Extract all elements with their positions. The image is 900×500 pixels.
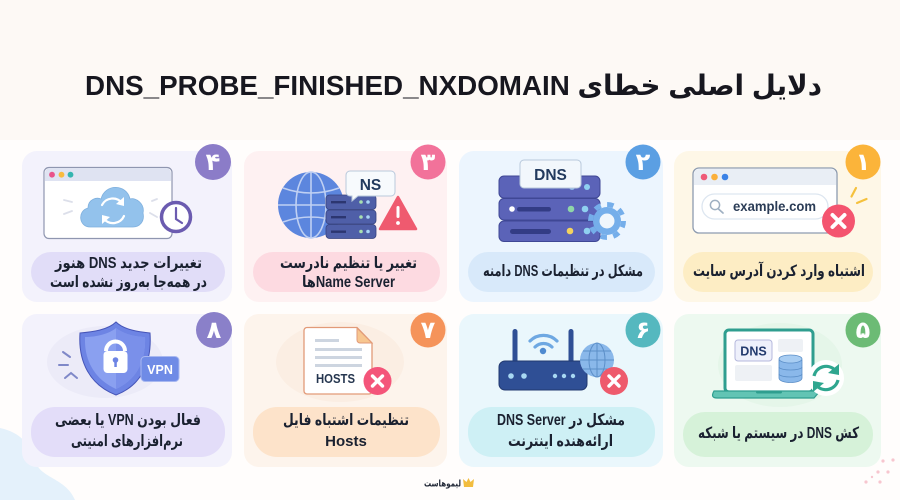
label: 5	[683, 412, 873, 457]
badge: 8	[196, 312, 232, 348]
label: 8: فعال بودن VPN یا بعضی	[55, 412, 201, 429]
label: 8: نرم‌افزارهای امنیتی	[71, 433, 183, 450]
label: 8	[31, 407, 225, 457]
label: 5: کش DNS در سیستم یا شبکه	[698, 425, 860, 442]
label: 4: در همه‌جا به‌روز نشده است	[50, 274, 207, 291]
badge: 6: ۶	[636, 317, 650, 344]
panel: 8 VPN and security software	[22, 312, 232, 467]
label: 2: مشکل در تنظیمات DNS دامنه	[483, 263, 643, 280]
label: 7: Hosts	[325, 433, 367, 450]
icon: hosts file with error	[304, 328, 392, 395]
icon: router, globe and error	[499, 329, 628, 395]
panel: 7 hosts file	[244, 312, 447, 467]
badge: 4: ۴	[206, 149, 220, 176]
badge: 3	[410, 144, 446, 180]
badge: 7	[410, 312, 446, 348]
icon: laptop with DNS database and sync	[713, 330, 844, 398]
badge: 1: ۱	[856, 149, 870, 176]
panel: 4 propagation	[22, 144, 232, 302]
badge: 2: ۲	[636, 149, 651, 176]
panel: 1 wrong address	[674, 144, 881, 302]
badge: 3: ۳	[421, 149, 436, 176]
label: 7	[253, 407, 440, 457]
badge: 6	[626, 312, 660, 348]
label: 4: تغییرات جدید DNS هنوز	[54, 255, 202, 272]
title: دلایل اصلی خطای DNS_PROBE_FINISHED_NXDOMAIN	[85, 70, 822, 101]
label: 3: Name Serverها	[302, 274, 395, 291]
icon: shield with lock and VPN tag: VPN	[147, 363, 173, 377]
icon: globe, name servers and warning	[278, 171, 416, 238]
label: 6	[468, 407, 655, 457]
panel: 6 ISP DNS server	[459, 312, 663, 467]
panel: 5 DNS cache	[674, 312, 881, 467]
panel: 3 name servers	[244, 144, 447, 302]
label: 7: تنظیمات اشتباه فایل	[283, 412, 409, 429]
icon: globe, name servers and warning: NS	[360, 177, 381, 194]
icon: laptop with DNS database and sync: DNS	[740, 344, 767, 358]
label: 4	[31, 252, 225, 292]
icon: hosts file with error: HOSTS	[316, 372, 355, 386]
badge: 1	[846, 144, 880, 180]
label: 3	[253, 252, 440, 292]
panel: 2 domain DNS settings	[459, 144, 663, 302]
icon: browser address bar with error	[693, 168, 866, 238]
footer logo: لیموهاست	[424, 478, 461, 490]
badge: 8: ۸	[207, 317, 222, 344]
badge: 7: ۷	[421, 317, 436, 344]
badge: 2	[626, 144, 660, 180]
icon: DNS server with gear: DNS	[534, 167, 567, 184]
label: 3: تغییر یا تنظیم نادرست	[280, 255, 417, 272]
icon: DNS server with gear	[499, 160, 624, 242]
icon: browser window with cloud sync and clock	[44, 168, 190, 238]
badge: 5: ۵	[856, 317, 870, 344]
label: 1	[683, 252, 873, 292]
icon: shield with lock and VPN tag	[59, 322, 179, 395]
badge: 4	[195, 144, 231, 180]
label: 2	[468, 252, 655, 292]
icon: browser address bar with error: example.com	[733, 199, 816, 214]
label: 6: مشکل در DNS Server	[497, 412, 625, 429]
label: 6: ارائه‌هنده اینترنت	[508, 433, 613, 450]
badge: 5	[846, 312, 880, 348]
